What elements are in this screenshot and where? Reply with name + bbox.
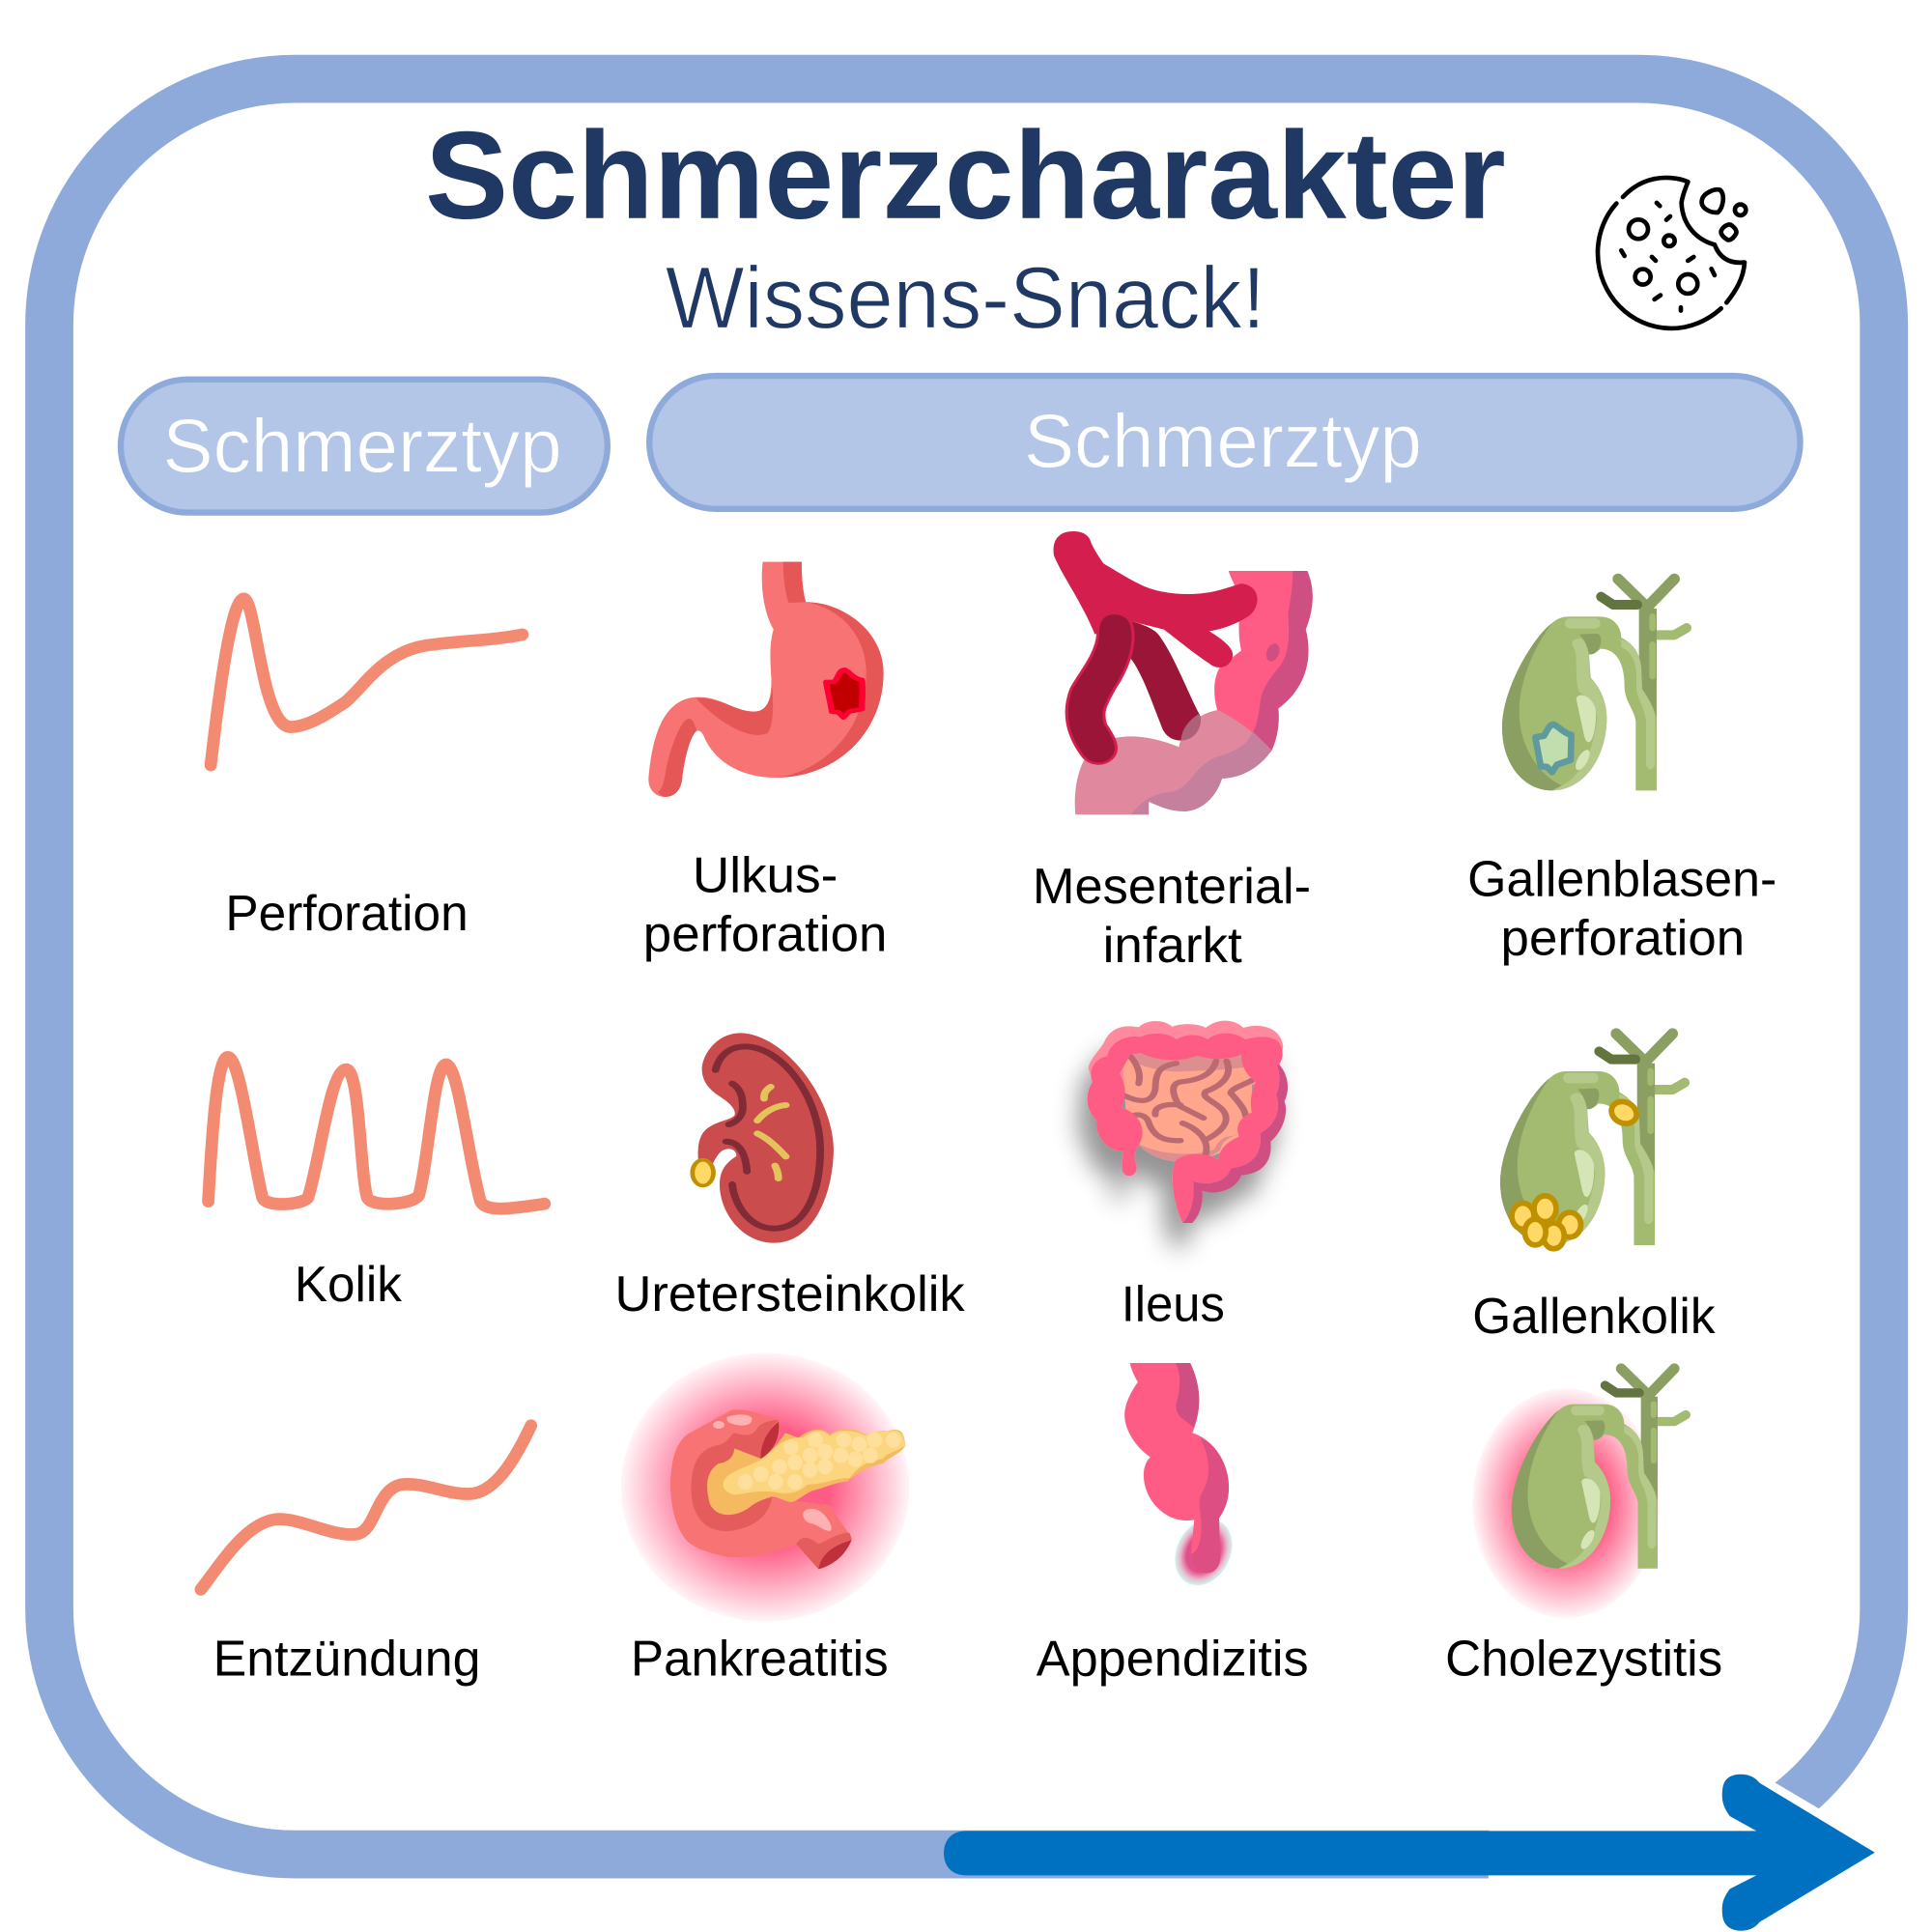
icon: gallbladder with perforation (1502, 579, 1687, 790)
title: Schmerzcharakter (425, 106, 1506, 245)
subtitle: Wissens-Snack! (666, 249, 1265, 347)
label: Ulkusperforation: perforation (643, 907, 887, 963)
label: Perforation: Perforation (225, 886, 469, 942)
icon: gallbladder with stones (1500, 1034, 1685, 1249)
panel header: Schmerztyp left (121, 380, 608, 513)
label: Uretersteinkolik: Uretersteinkolik (614, 1266, 966, 1322)
label: Kolik: Kolik (295, 1257, 403, 1313)
icon: intestines with shadow (1088, 1021, 1288, 1223)
icon: inflamed gallbladder (1472, 1369, 1686, 1618)
label: Entzündung: Entzündung (213, 1632, 480, 1688)
icon: stomach with ulcer (648, 562, 884, 797)
chart: Entzündung pain curve (201, 1426, 531, 1589)
label: Gallenblasenperforation: perforation (1501, 911, 1745, 967)
label: Cholezystitis: Cholezystitis (1445, 1632, 1722, 1688)
chart: Perforation pain curve (211, 599, 523, 765)
icon: inflamed appendix (1124, 1363, 1240, 1589)
icon: mesenteric arteries and bowel (1054, 531, 1313, 814)
icon: cookie (1598, 178, 1746, 328)
label: Ulkusperforation (643, 847, 887, 963)
panel header: Schmerztyp right: Schmerztyp (1024, 397, 1422, 483)
panel header: Schmerztyp left: Schmerztyp (162, 403, 562, 489)
label: Appendizitis: Appendizitis (1037, 1632, 1309, 1688)
label: Gallenblasenperforation (1467, 851, 1776, 967)
label: Mesenterialinfarkt: Mesenterial- (1033, 859, 1311, 915)
arrow (944, 1775, 1875, 1931)
label: Gallenkolik: Gallenkolik (1472, 1289, 1716, 1345)
label: Mesenterialinfarkt (1033, 859, 1311, 974)
chart: Kolik pain curve (209, 1057, 545, 1208)
panel header: Schmerztyp right (649, 376, 1801, 509)
label: Ulkusperforation: Ulkus- (693, 847, 838, 903)
icon: inflamed pancreas (621, 1353, 909, 1622)
icon: kidney with ureter stone (693, 1033, 834, 1243)
label: Gallenblasenperforation: Gallenblasen- (1467, 851, 1776, 907)
label: Pankreatitis: Pankreatitis (631, 1632, 889, 1688)
label: Ileus: Ileus (1122, 1276, 1225, 1332)
label: Mesenterialinfarkt: infarkt (1103, 918, 1242, 974)
